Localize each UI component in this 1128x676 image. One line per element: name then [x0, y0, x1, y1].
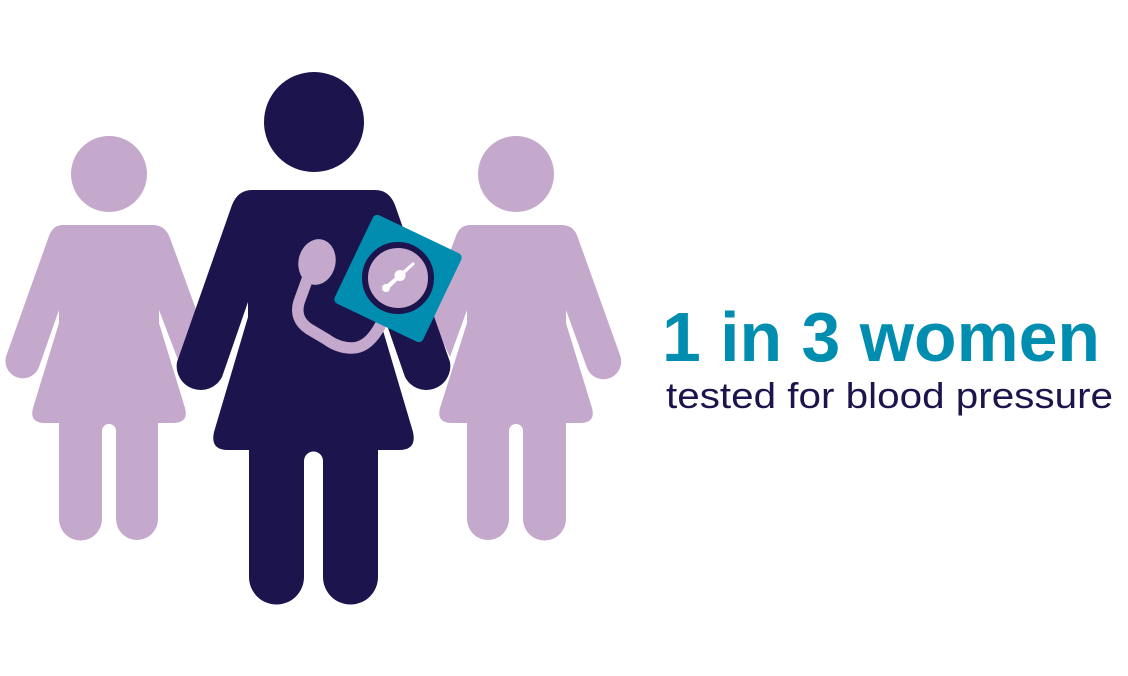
icon: right woman [428, 136, 621, 540]
icon: left woman [5, 136, 198, 540]
heading: 1 in 3 women [662, 298, 1100, 376]
icon: bulb [294, 236, 340, 288]
icon: gauge dial [365, 245, 431, 311]
icon: tube [298, 280, 380, 348]
subheading: tested for blood pressure [666, 375, 1113, 416]
icon: central woman [177, 72, 450, 604]
icon: blood pressure monitor [294, 213, 463, 348]
icon: gauge case [333, 213, 463, 344]
icon: needle [382, 262, 415, 292]
